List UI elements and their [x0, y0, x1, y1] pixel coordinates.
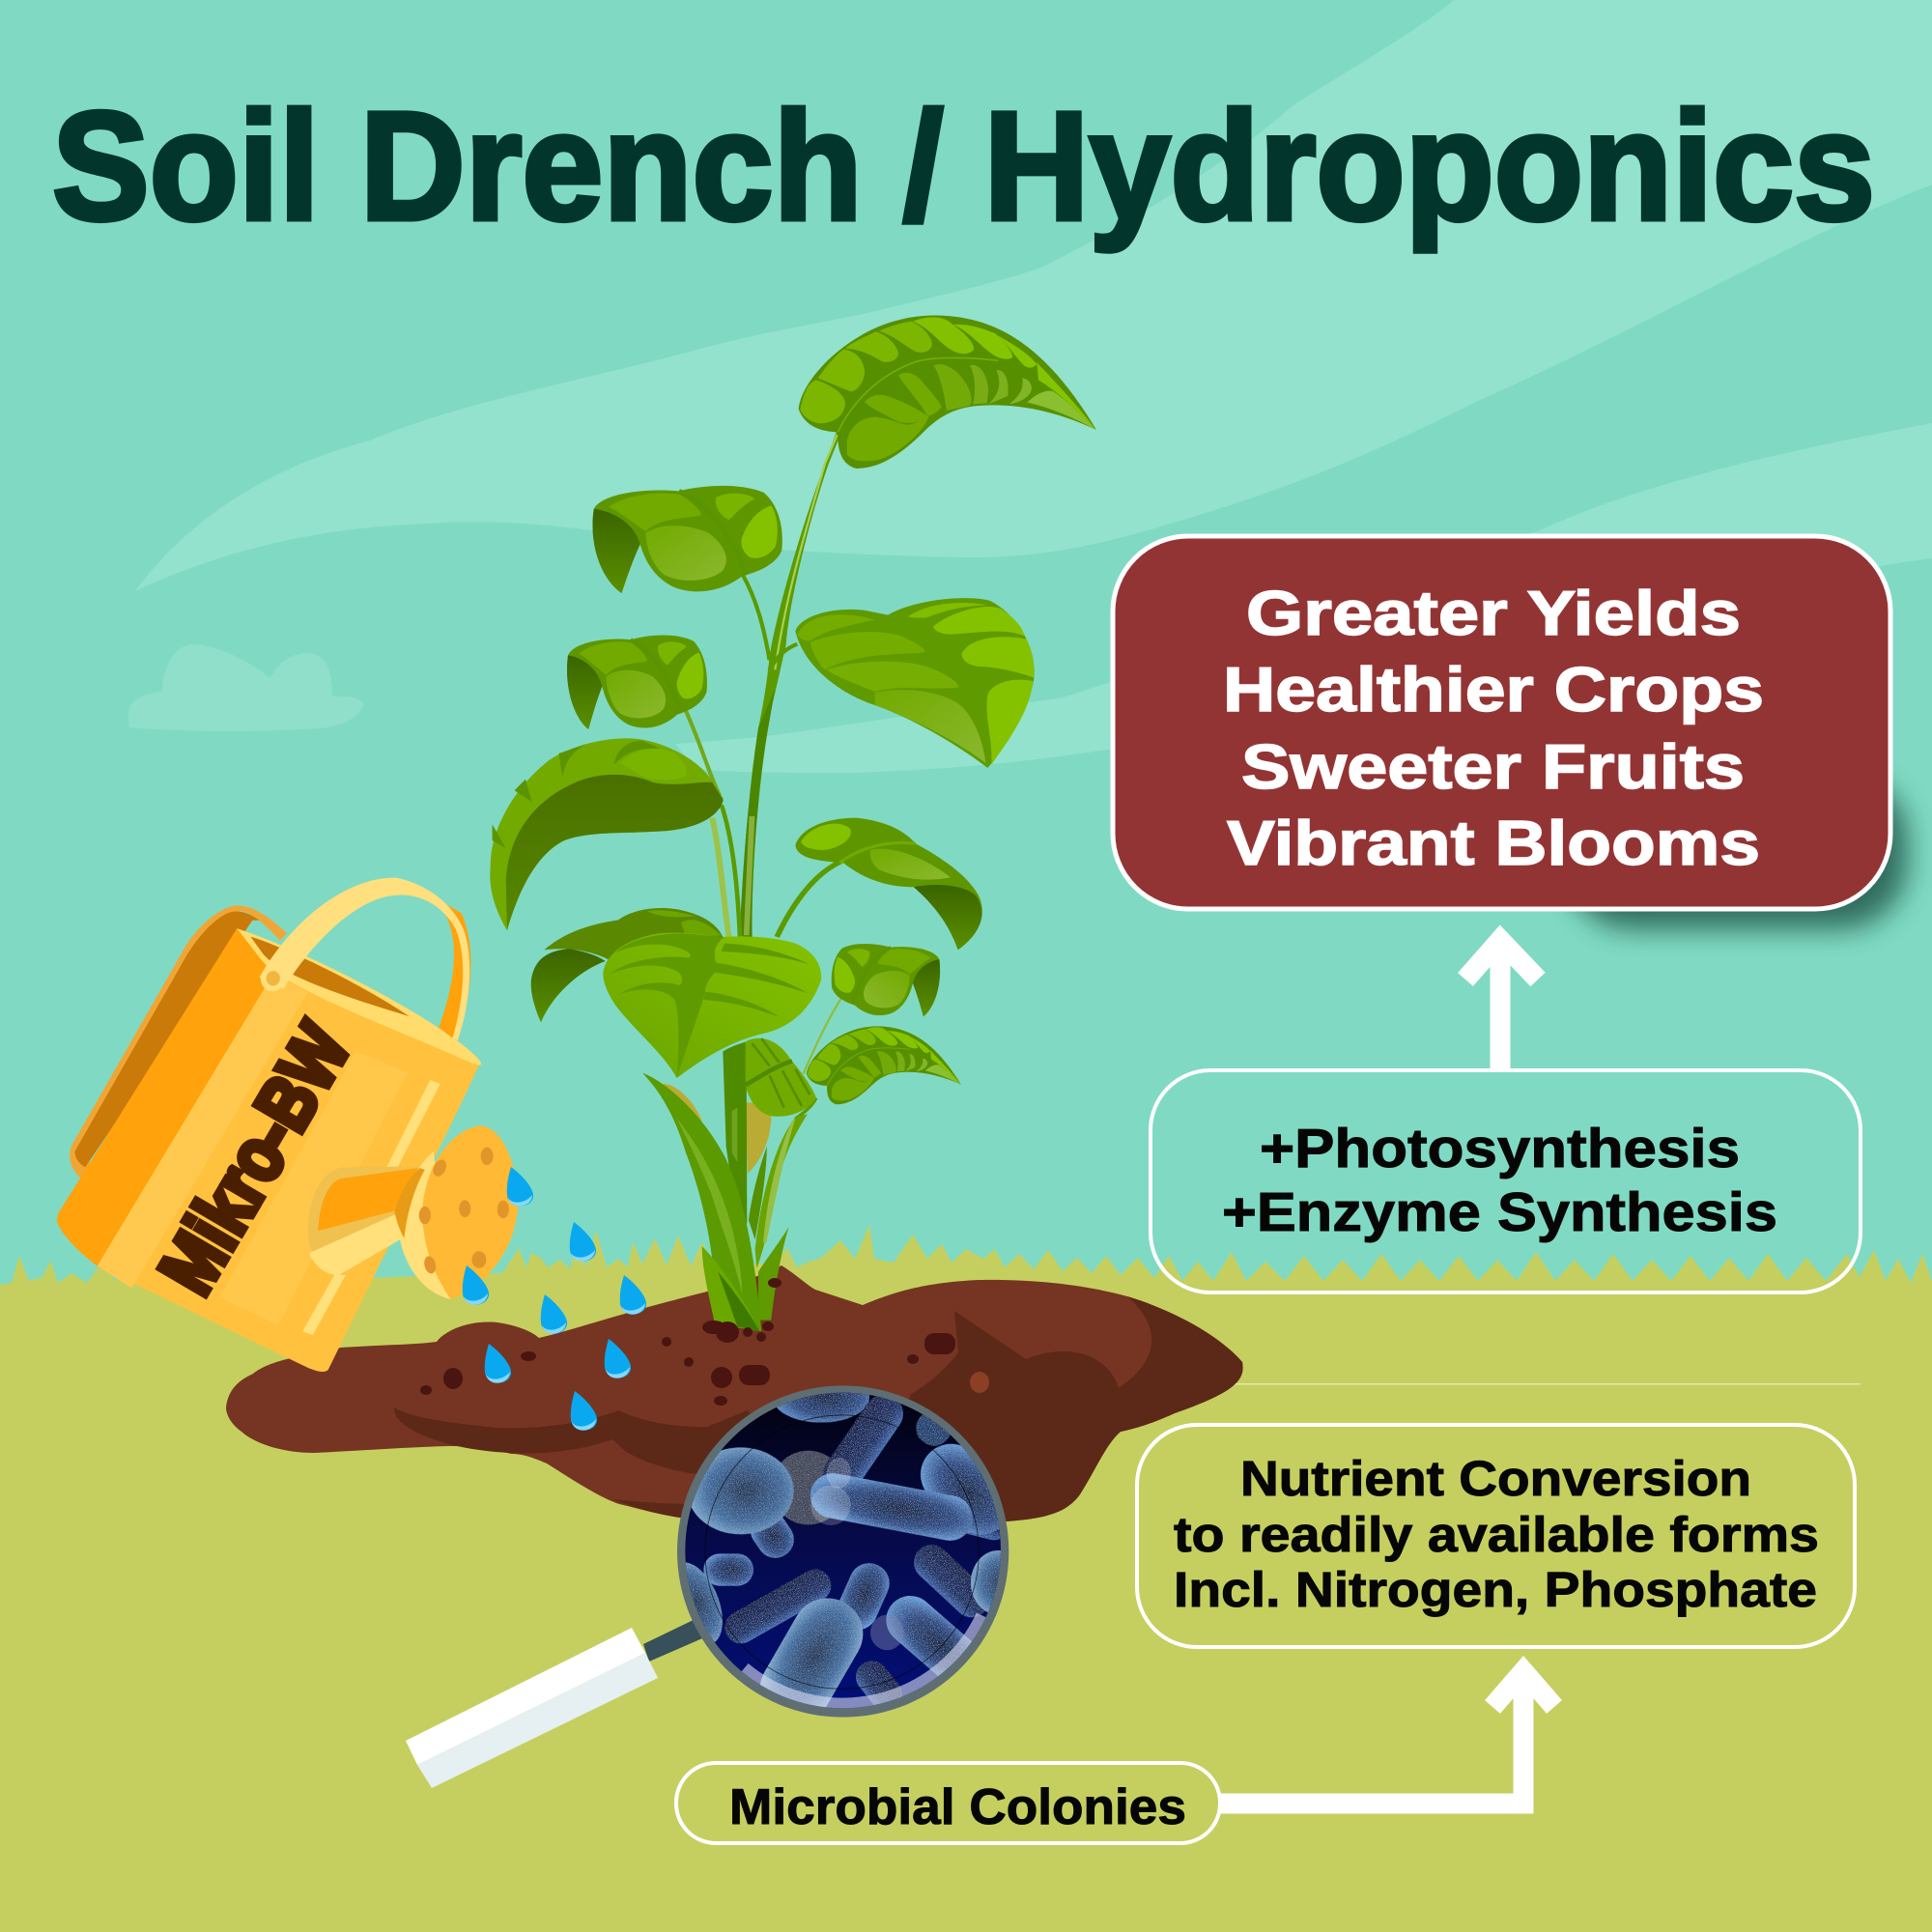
leaf: big front — [603, 933, 821, 1078]
callout: synthesis: +Photosynthesis — [1260, 1118, 1740, 1179]
callout: benefits: Vibrant Blooms — [1227, 808, 1760, 878]
leaf: lower centre — [746, 1038, 816, 1117]
watering can — [57, 878, 518, 1372]
title: Soil Drench / Hydroponics — [52, 79, 1875, 252]
front handle — [259, 878, 470, 1040]
callout: nutrient conversion: to readily available forms — [1174, 1507, 1819, 1562]
leaf: right lower — [795, 818, 982, 950]
can label: Mikro-BW — [143, 1009, 366, 1308]
leaf: top — [799, 315, 1096, 469]
lens with bacteria — [677, 1385, 1009, 1718]
leaf: right middle — [795, 598, 1035, 768]
callout: benefits — [1113, 536, 1908, 929]
leaf: small left — [567, 636, 707, 729]
base leaves — [642, 1073, 808, 1331]
lower plant: stem, leaves and base — [531, 908, 961, 1331]
can rim and opening — [237, 928, 481, 1065]
leaf: big left — [490, 738, 724, 930]
back handle — [70, 905, 287, 1179]
soil clumps — [420, 1333, 955, 1406]
callout: synthesis — [1151, 1070, 1861, 1293]
can stripe details — [98, 974, 440, 1335]
lower stem — [723, 990, 847, 1224]
tan old leaves — [664, 1084, 771, 1174]
handle — [406, 1616, 709, 1788]
arrow: colonies to nutrient conversion — [1220, 1671, 1554, 1804]
rose head — [394, 1125, 518, 1299]
can body dark side — [57, 928, 273, 1266]
soil mound — [226, 1265, 1243, 1521]
callout: microbial colonies: Microbial Colonies — [729, 1779, 1186, 1835]
callout: nutrient conversion — [1137, 1425, 1855, 1647]
leaf: bottom left behind — [531, 908, 723, 1022]
callout: benefits: Greater Yields — [1246, 578, 1741, 648]
leaf: upper left — [592, 486, 782, 593]
can body light side — [98, 928, 480, 1372]
spout — [307, 1166, 419, 1275]
cloud — [128, 644, 363, 731]
water droplets — [463, 1167, 646, 1431]
leaf: lower right with veins — [807, 1026, 961, 1104]
leaf: small right curl — [832, 944, 940, 1016]
arrow: up to benefits — [1465, 940, 1538, 1072]
stems — [683, 432, 841, 937]
callout: synthesis: +Enzyme Synthesis — [1222, 1181, 1777, 1243]
upper plant: stems and leaves — [490, 432, 1035, 950]
plant — [490, 315, 1096, 1331]
ground with grass — [0, 1225, 1932, 1932]
plant base clumps — [702, 1278, 781, 1343]
callout: microbial colonies — [676, 1763, 1220, 1843]
callout: nutrient conversion: Incl. Nitrogen, Phosphate — [1174, 1562, 1817, 1617]
callout: nutrient conversion: Nutrient Conversion — [1240, 1451, 1751, 1506]
callout: benefits: Sweeter Fruits — [1241, 731, 1745, 802]
magnifier — [406, 1373, 1026, 1788]
callout: benefits: Healthier Crops — [1223, 654, 1764, 724]
soil shadow — [394, 1296, 1243, 1521]
